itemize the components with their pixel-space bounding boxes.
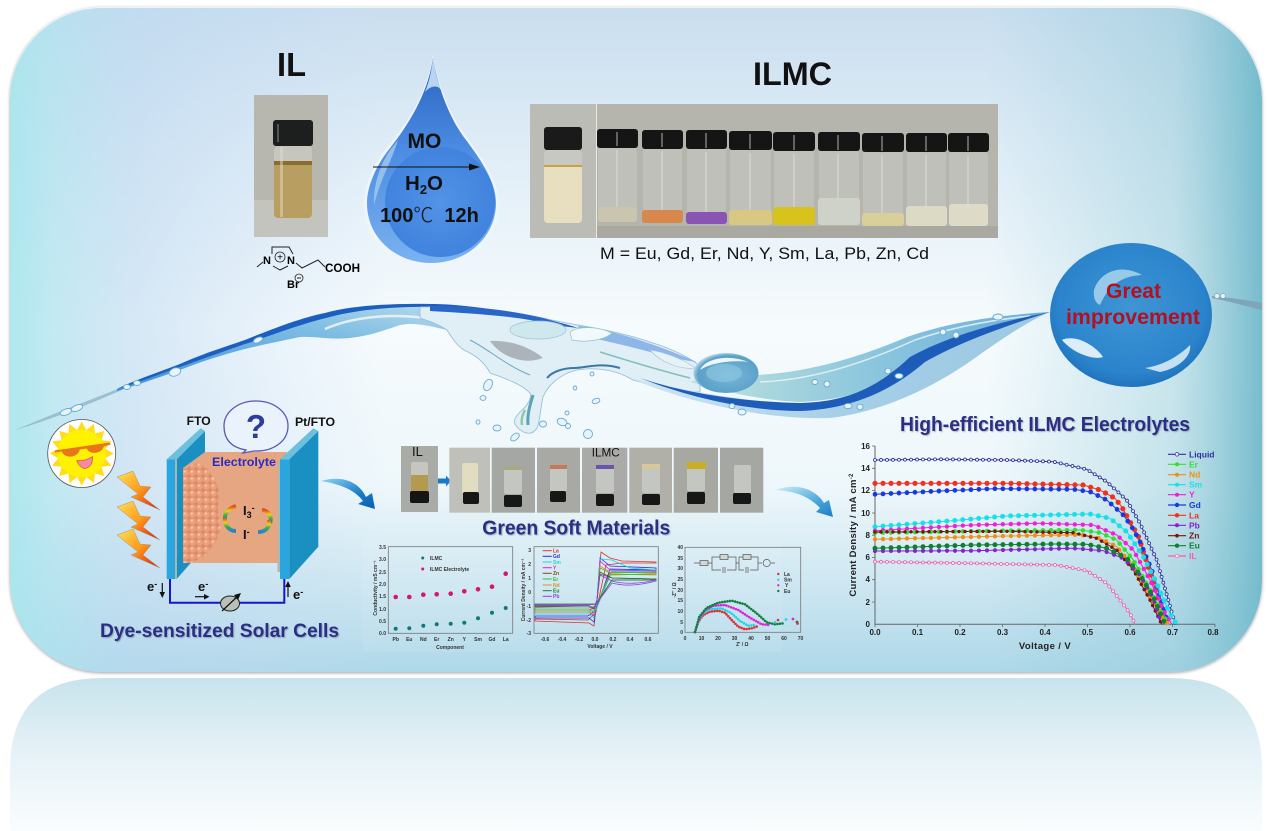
chart: impedance <box>672 545 803 648</box>
chart: cyclic voltammetry <box>521 547 658 650</box>
ILMC gel photos <box>449 446 763 513</box>
chart: conductivity: 1.0 <box>379 607 386 613</box>
chart: cyclic voltammetry: -1 <box>527 604 531 610</box>
chart: cyclic voltammetry: Y <box>553 566 557 572</box>
chart: cyclic voltammetry: -0.2 <box>575 637 584 643</box>
electrolyte body <box>183 452 287 563</box>
chart: conductivity: 3.5 <box>379 545 386 551</box>
legend: IL <box>1189 551 1197 561</box>
chart: J-V curves: 0.2 <box>954 628 966 637</box>
chart: conductivity: Nd <box>420 637 427 643</box>
redox labels: I <box>243 503 247 518</box>
redox labels: I <box>243 527 247 542</box>
reflection panel <box>10 678 1262 831</box>
chart: cyclic voltammetry: 0.6 <box>645 637 652 643</box>
great improvement ball: improvement <box>1066 306 1200 329</box>
chart: impedance: 0 <box>680 630 683 636</box>
chart: impedance: 30 <box>732 636 737 642</box>
redox labels: - <box>252 503 255 513</box>
chart: conductivity: 2.0 <box>379 582 386 588</box>
ILMC gel photos: ILMC <box>592 446 620 460</box>
chart: conductivity: 0.5 <box>379 619 386 625</box>
chart: impedance: 30 <box>677 566 683 572</box>
chart: cyclic voltammetry: Current Density / mA cm⁻² <box>521 558 527 621</box>
chart: cyclic voltammetry: 3 <box>528 548 531 554</box>
chart: cyclic voltammetry: Er <box>553 577 558 583</box>
chart: impedance: 40 <box>677 545 683 551</box>
chart: J-V curves: Voltage / V <box>1019 641 1071 652</box>
curve lines <box>875 459 1176 624</box>
photo: ILMC vials <box>530 104 998 238</box>
chart: cyclic voltammetry: Gd <box>553 554 560 560</box>
chart: conductivity: Component <box>436 645 464 651</box>
chart: cyclic voltammetry: Sm <box>553 560 561 566</box>
electron labels and arrows: e <box>293 587 300 602</box>
chart: J-V curves: 0.1 <box>912 628 924 637</box>
splash drops and bubbles <box>59 314 1003 443</box>
legend <box>1168 449 1214 561</box>
chart: J-V curves <box>848 442 1219 652</box>
heading: high-efficient ILMC electrolytes: High-efficient ILMC Electrolytes <box>900 414 1190 436</box>
axes <box>872 446 1215 627</box>
soft material photos <box>401 444 763 513</box>
icon: sun with sunglasses <box>48 420 116 488</box>
chart: impedance: 35 <box>677 556 683 562</box>
arrow: cell to soft materials <box>321 479 375 509</box>
water wave <box>15 304 1050 433</box>
chart: J-V curves: 0.4 <box>1039 628 1051 637</box>
chart: J-V curves: Current Density / mA cm <box>848 479 859 597</box>
legend: Liquid <box>1189 449 1214 459</box>
redox labels: - <box>247 527 250 537</box>
chart: cyclic voltammetry: Pb <box>553 594 559 600</box>
chart: impedance: 15 <box>677 598 683 604</box>
chart: impedance: Y <box>785 583 789 589</box>
left FTO plate <box>167 428 205 579</box>
curve markers <box>875 459 1176 624</box>
chart: impedance: 0 <box>684 636 687 642</box>
chart: conductivity <box>373 545 513 651</box>
chart: cyclic voltammetry: 0.4 <box>627 637 634 643</box>
first vial <box>544 127 582 223</box>
row of nine metal vials <box>597 129 989 226</box>
chart: impedance: 10 <box>699 636 704 642</box>
arrow: soft materials to electrolytes <box>776 487 833 517</box>
legend: Er <box>1189 459 1199 469</box>
background panel <box>10 7 1262 672</box>
equivalent circuit <box>694 554 775 573</box>
chart: impedance: 60 <box>781 636 787 642</box>
water drop with reaction conditions: O <box>427 172 443 195</box>
chart: impedance: La <box>784 572 790 578</box>
right wave tail <box>1212 294 1262 310</box>
chart: cyclic voltammetry: -0.6 <box>541 637 550 643</box>
water drop with reaction conditions: 100℃ 12h <box>380 199 479 228</box>
electron labels and arrows: e <box>147 579 154 594</box>
legend: Eu <box>1189 541 1200 551</box>
IL gel photo <box>401 444 438 512</box>
water drop with reaction conditions: 2 <box>420 182 427 197</box>
chart: conductivity: Zn <box>448 637 454 643</box>
chart: conductivity: ILMC Electrolyte <box>430 567 469 573</box>
electron labels and arrows <box>147 579 303 602</box>
great improvement ball <box>1050 243 1212 387</box>
chart: conductivity: Er <box>434 637 439 643</box>
chart: cyclic voltammetry: Voltage / V <box>587 644 613 650</box>
electron labels and arrows: - <box>300 587 303 597</box>
chart: conductivity: Sm <box>474 637 482 643</box>
solar cell diagram <box>147 401 335 611</box>
water drop with reaction conditions <box>364 55 499 268</box>
heading: green soft materials: Green Soft Materials <box>482 517 670 539</box>
chart: impedance: Eu <box>784 589 790 595</box>
chart: impedance: 10 <box>677 609 683 615</box>
chart: J-V curves: 0.7 <box>1167 628 1179 637</box>
icon: lightning bolts <box>117 471 160 568</box>
water droplet on wave <box>694 353 758 393</box>
chart: impedance: 50 <box>765 636 770 642</box>
right Pt/FTO plate <box>278 428 318 579</box>
legend: Pb <box>1189 520 1200 530</box>
chart: J-V curves: 2 <box>866 598 871 607</box>
legend: La <box>1189 510 1199 520</box>
chart: conductivity: Conductivity / mS cm⁻¹ <box>373 560 379 616</box>
chart: J-V curves: 8 <box>866 531 871 540</box>
chart: J-V curves: 0.8 <box>1207 628 1219 637</box>
chart: J-V curves: 16 <box>861 442 871 451</box>
external circuit <box>170 579 284 611</box>
chart: cyclic voltammetry: 0 <box>528 590 531 596</box>
Pt/FTO label: Pt/FTO <box>295 417 335 429</box>
chart: conductivity: Gd <box>489 637 495 643</box>
chart: J-V curves: 6 <box>866 553 871 562</box>
chart: J-V curves: 12 <box>861 486 871 495</box>
chart: cyclic voltammetry: -0.4 <box>558 637 567 643</box>
chart: impedance: Z' / Ω <box>736 642 749 648</box>
chart: impedance: Sm <box>784 578 792 584</box>
electron labels and arrows: - <box>205 579 208 589</box>
chart: cyclic voltammetry: Eu <box>553 588 559 594</box>
chart: cyclic voltammetry: -2 <box>527 618 531 624</box>
chart: cyclic voltammetry: 1 <box>528 576 531 582</box>
callout question: ? <box>246 408 266 445</box>
molecule structure: + <box>277 252 283 264</box>
water drop with reaction conditions: MO <box>408 130 441 153</box>
legend: Sm <box>1189 480 1203 490</box>
molecule structure <box>257 247 360 291</box>
chart: J-V curves: 4 <box>866 575 871 584</box>
electron labels and arrows: e <box>198 579 205 594</box>
chart: cyclic voltammetry: -3 <box>527 631 531 637</box>
redox labels <box>243 503 255 542</box>
molecule structure: N <box>287 255 295 267</box>
chart: conductivity: 2.5 <box>379 570 386 576</box>
chart: J-V curves: 0 <box>866 620 871 629</box>
chart: conductivity: La <box>503 637 509 643</box>
chart: conductivity: Pb <box>393 637 399 643</box>
electron labels and arrows: - <box>154 579 157 589</box>
chart: conductivity: Eu <box>406 637 412 643</box>
splash body <box>420 307 700 433</box>
chart: conductivity: 1.5 <box>379 594 386 600</box>
chart: conductivity: ILMC <box>430 556 443 562</box>
molecule structure: N <box>263 255 271 267</box>
heading: dye-sensitized solar cells: Dye-sensitized Solar Cells <box>100 620 339 642</box>
metals caption: M = Eu, Gd, Er, Nd, Y, Sm, La, Pb, Zn, Cd <box>600 245 929 263</box>
water drop with reaction conditions: H <box>405 172 420 195</box>
redox labels: 3 <box>247 510 252 520</box>
molecule structure: COOH <box>325 261 360 275</box>
chart: cyclic voltammetry: 0.0 <box>592 637 599 643</box>
photo: IL vial <box>254 95 328 237</box>
great improvement ball: Great <box>1106 280 1161 303</box>
heading: IL: IL <box>277 46 306 83</box>
legend: Y <box>1189 490 1195 500</box>
chart: J-V curves: -2 <box>849 473 855 479</box>
chart: J-V curves: 0.3 <box>997 628 1009 637</box>
chart: impedance: 25 <box>677 577 683 583</box>
chart: cyclic voltammetry: 2 <box>528 562 531 568</box>
nanoparticle layer <box>183 463 221 563</box>
chart backdrop <box>362 540 782 652</box>
chart: conductivity: 3.0 <box>379 557 386 563</box>
chart: cyclic voltammetry: La <box>553 548 559 554</box>
electrolyte label: Electrolyte <box>212 457 276 469</box>
chart: impedance: 20 <box>677 588 683 594</box>
chart: impedance: 5 <box>680 620 683 626</box>
chart: J-V curves: 0.5 <box>1082 628 1094 637</box>
chart: cyclic voltammetry: 0.2 <box>610 637 617 643</box>
FTO label: FTO <box>187 416 211 428</box>
chart: J-V curves: 10 <box>861 509 871 518</box>
legend: Nd <box>1189 470 1200 480</box>
chart: J-V curves: 14 <box>861 464 871 473</box>
arrow small <box>438 476 451 486</box>
callout question <box>224 401 288 453</box>
chart: impedance: 20 <box>715 636 721 642</box>
IL gel photo: IL <box>412 444 423 459</box>
main swoosh <box>630 312 1050 418</box>
chart: cyclic voltammetry: Nd <box>553 583 560 589</box>
legend: Zn <box>1189 531 1199 541</box>
heading: ILMC: ILMC <box>753 56 832 92</box>
chart: conductivity: Y <box>463 637 467 643</box>
legend: Gd <box>1189 500 1201 510</box>
chart: impedance: 70 <box>798 636 803 642</box>
molecule structure: Br <box>287 279 300 291</box>
chart: conductivity: 0.0 <box>379 631 386 637</box>
chart: J-V curves: 0.0 <box>869 628 881 637</box>
rainbow redox arrows <box>225 506 271 532</box>
chart: impedance: -Z'' / Ω <box>672 582 678 598</box>
chart: cyclic voltammetry: Zn <box>553 571 559 577</box>
chart: impedance: 40 <box>748 636 754 642</box>
chart: J-V curves: 0.6 <box>1124 628 1136 637</box>
